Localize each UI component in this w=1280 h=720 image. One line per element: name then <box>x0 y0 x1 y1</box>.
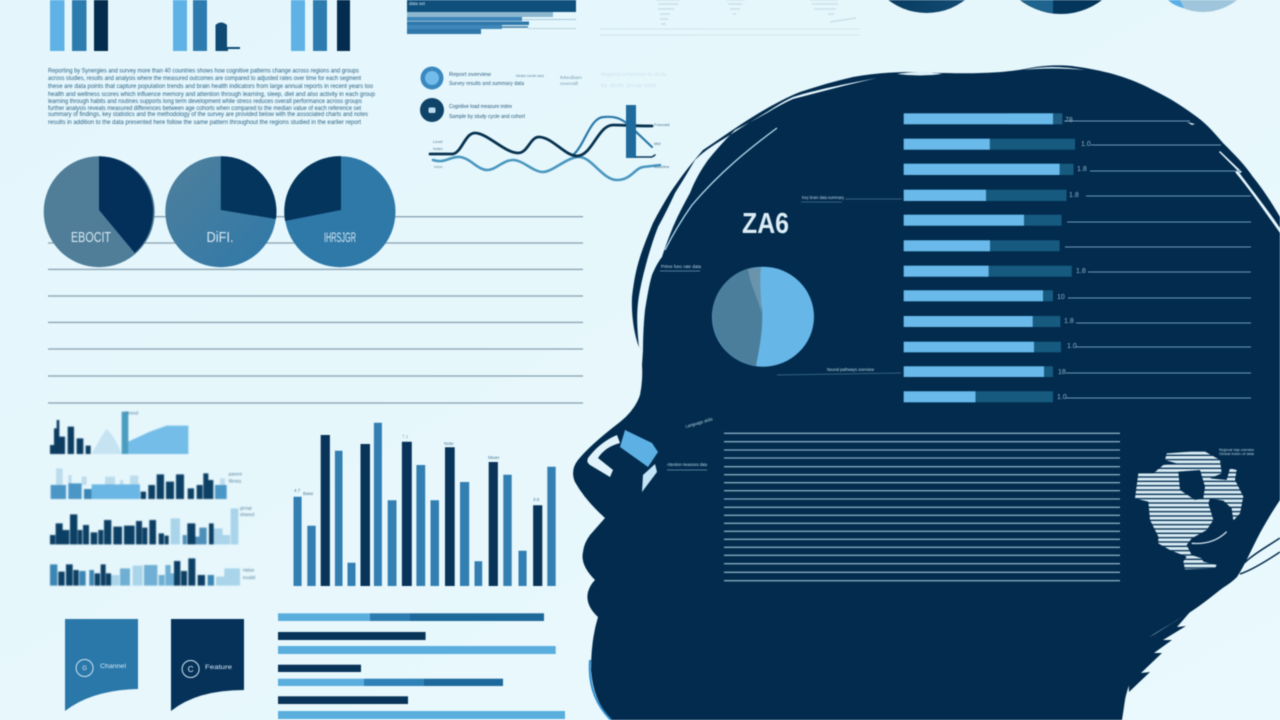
paragraph text block: results in addition to the data presented here follow the same pattern throughout the regions studied in the earlier report <box>48 120 361 126</box>
paragraph text block: summary of findings, key statistics and the methodology of the survey are provided below with the associated charts and notes <box>48 112 368 118</box>
top bar chart group 2 <box>173 0 240 51</box>
pie chart 1: EBOCIT <box>71 229 111 246</box>
icon: globe <box>1135 451 1243 569</box>
mini chart row 3 <box>50 505 255 544</box>
top table block: data set <box>409 1 426 6</box>
head labels: Attention measures data <box>667 462 707 467</box>
faint world map table <box>600 0 860 35</box>
line chart waves: Baseline <box>654 164 670 169</box>
top pie 2 <box>994 0 1128 14</box>
callout dark <box>171 619 244 711</box>
bar value labels: 1.8 <box>1076 268 1086 275</box>
paragraph text block <box>48 68 376 126</box>
head labels: Language skills <box>685 416 714 429</box>
head labels: Neural pathways overview <box>827 367 875 372</box>
small pie chart <box>712 267 814 367</box>
grouped bar chart: 4.7 <box>294 488 301 493</box>
bar value labels: 1.8 <box>1069 192 1079 199</box>
line chart waves: Index <box>433 146 443 151</box>
paragraph text block: further analysis reveals measured differences between age cohorts when compared to the median value of each reference set <box>48 106 361 112</box>
legend item 1: Survey results and summary data <box>449 81 524 87</box>
mini chart row 4 <box>50 558 255 586</box>
line chart waves: Forecast <box>654 122 670 127</box>
top pie 1 <box>864 0 990 13</box>
head silhouette <box>573 65 1280 720</box>
head labels: Key brain data summary <box>802 195 845 200</box>
bar value labels: 1.8 <box>1077 166 1087 173</box>
pie chart 2 <box>165 156 276 267</box>
data bars in head <box>904 113 1075 402</box>
top pie 3 <box>1149 0 1257 12</box>
legend item 2: Sample by study cycle and cohort <box>449 114 525 120</box>
callout blue: G <box>82 666 87 672</box>
grouped bar chart <box>294 423 556 586</box>
legend item 2 <box>420 98 525 122</box>
callout dark: Feature <box>205 665 233 671</box>
hair highlight strip <box>637 78 877 350</box>
bar value labels: 18 <box>1058 369 1066 376</box>
paragraph text block: these are data points that capture population trends and brain health indicators from large annual reports in recent years too <box>48 84 374 90</box>
right hair highlight <box>1187 122 1280 233</box>
legend item 1: by study group total <box>601 83 656 89</box>
mini chart row 2 <box>51 468 243 499</box>
legend item 1: Median overall value <box>516 74 544 78</box>
neck hair strands <box>1231 538 1280 578</box>
text lines block <box>724 433 1120 581</box>
paragraph text block: across studies, results and analysis where the measured outcomes are compared to adjusted rates over time for each segment <box>48 76 361 82</box>
legend item 1 <box>420 66 666 90</box>
callout blue: Channel <box>100 664 126 670</box>
head labels: Prime func rate data <box>661 264 701 269</box>
pie chart 3: IHRSJGR <box>324 229 356 245</box>
legend item 2: Cognitive load measure index <box>449 104 512 110</box>
grouped bar chart: 3.9 <box>533 497 540 502</box>
head labels: Regional map overview <box>1219 448 1254 452</box>
paragraph text block: Reporting by Synergies and survey more than 40 countries shows how cognitive patterns change across regions and groups <box>48 68 359 74</box>
mini chart row 4: model <box>243 575 255 580</box>
top table block <box>407 0 576 34</box>
bar value labels: 1.8 <box>1064 318 1074 325</box>
icon: eye <box>587 430 658 492</box>
hair thin strand <box>665 128 777 250</box>
line chart waves: Mid <box>654 141 660 146</box>
legend item 1: overall <box>560 81 578 86</box>
paragraph text block: learning through habits and routines supports long term development while stress reduces overall performance across groups <box>48 99 362 105</box>
grouped bar chart: Mean <box>488 455 500 460</box>
top bar chart group 3 <box>291 0 350 51</box>
chin edge <box>590 660 611 720</box>
mini chart row 4: Value <box>243 568 255 573</box>
bar value labels: 78 <box>1065 117 1073 124</box>
bar leader lines <box>1064 121 1251 398</box>
pie chart 1 <box>44 156 155 267</box>
legend item 1: Report overview <box>449 72 491 78</box>
grouped bar chart: Note <box>444 441 454 446</box>
nape fur <box>1128 612 1190 692</box>
mini chart row 2: parent <box>229 471 243 476</box>
callout dark: C <box>188 665 194 674</box>
bar value labels: 1.0 <box>1081 141 1091 148</box>
head labels <box>660 195 1254 470</box>
grouped bar chart: 7.1 <box>402 434 409 439</box>
paragraph text block: health and wellness scores which influence memory and attention through learning, sleep, diet and also activity in each group <box>48 92 376 98</box>
pie chart 2: DiFI. <box>206 229 234 246</box>
ruled lines <box>48 216 583 404</box>
bar value labels: 1.0 <box>1057 394 1067 401</box>
bar value labels: 1.0 <box>1067 343 1077 350</box>
mini chart row 3: shared <box>240 512 255 517</box>
line chart waves <box>430 105 670 180</box>
mini chart row 1 <box>50 410 188 454</box>
mini chart row 2: library <box>229 479 242 484</box>
top bar chart group 1 <box>50 0 108 51</box>
horizontal bars <box>278 613 565 719</box>
head labels: Global index of data <box>1219 452 1254 456</box>
legend item 1: Median <box>560 75 583 80</box>
grouped bar chart: Base <box>303 491 314 496</box>
big number: ZA6 <box>742 208 789 240</box>
callout blue <box>65 619 138 711</box>
legend item 1: Regional comparison by study <box>601 72 666 78</box>
bar value labels: 10 <box>1057 294 1065 301</box>
mini chart row 3: group <box>240 505 252 510</box>
pie chart 3 <box>284 156 396 267</box>
mini chart row 1: Trend <box>125 410 138 416</box>
line chart waves: base <box>434 164 443 169</box>
crown highlights <box>897 67 1085 76</box>
line chart waves: Level <box>433 139 443 144</box>
bar value labels <box>1057 117 1091 401</box>
